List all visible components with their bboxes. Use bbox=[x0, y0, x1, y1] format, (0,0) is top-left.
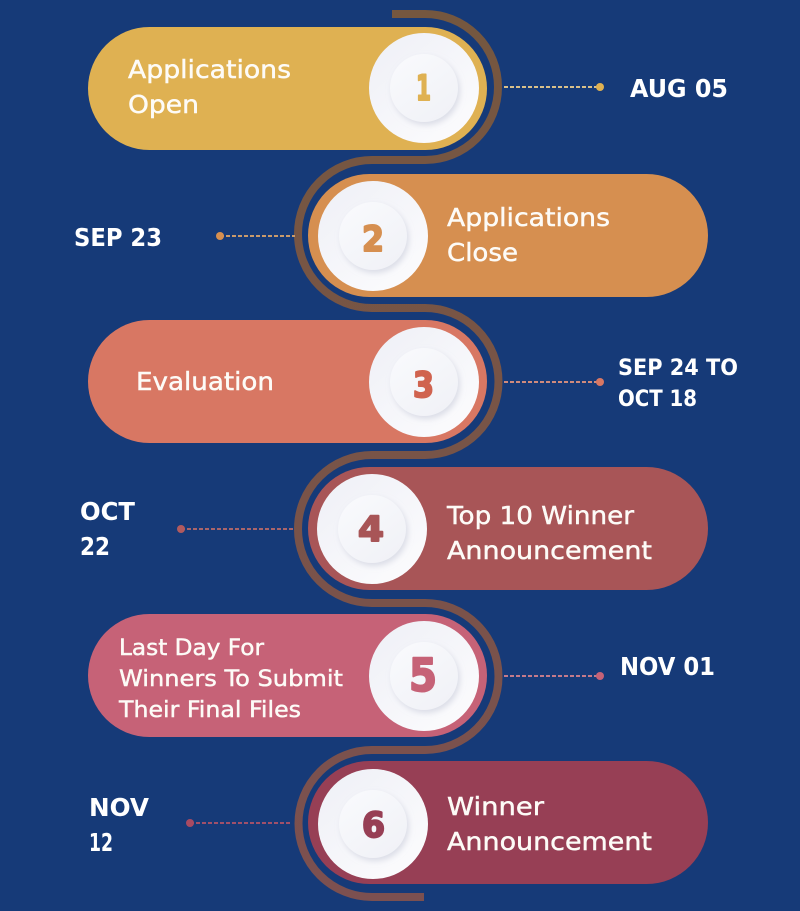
step 2 bbox=[74, 174, 708, 297]
connector to SEP 23 bbox=[216, 232, 295, 240]
date: NOV 12: NOV bbox=[89, 793, 149, 822]
label: Winner Announcement bbox=[447, 792, 652, 856]
label: Top 10 Winner Announcement: Announcement bbox=[447, 536, 652, 565]
connector to SEP 24 TO OCT 18 bbox=[504, 378, 604, 386]
number badge 6 bbox=[318, 769, 428, 879]
date: NOV 01: NOV 01 bbox=[620, 652, 715, 681]
connector to NOV 01 bbox=[504, 672, 604, 680]
step 6 bbox=[89, 761, 708, 884]
number badge 1 bbox=[369, 33, 479, 143]
label: Evaluation: Evaluation bbox=[136, 367, 274, 396]
step 5 bbox=[88, 614, 715, 737]
label: Applications Open bbox=[128, 55, 291, 119]
date: SEP 24 TO OCT 18: OCT 18 bbox=[618, 387, 697, 412]
number badge 5 bbox=[369, 621, 479, 731]
number badge 1: 1 bbox=[416, 69, 431, 109]
pill: Applications Close bbox=[308, 174, 708, 297]
step 3 bbox=[88, 320, 738, 443]
connector to OCT 22 bbox=[177, 525, 295, 533]
label: Top 10 Winner Announcement bbox=[446, 501, 652, 565]
pill: Last Day For Winners To Submit Their Final Files bbox=[88, 614, 487, 737]
number badge 3 bbox=[369, 327, 479, 437]
number badge 4: 4 bbox=[358, 510, 384, 550]
pill: Evaluation bbox=[88, 320, 487, 443]
pill: Winner Announcement bbox=[308, 761, 708, 884]
label: Applications Close bbox=[447, 203, 610, 267]
connector to NOV 12 bbox=[186, 819, 290, 827]
date: OCT 22 bbox=[80, 497, 135, 561]
label: Winner Announcement: Announcement bbox=[447, 827, 652, 856]
date: OCT 22: OCT bbox=[80, 497, 135, 526]
date: OCT 22: 22 bbox=[80, 532, 110, 561]
date: SEP 23: SEP 23 bbox=[74, 223, 162, 252]
pill: Top 10 Winner Announcement bbox=[308, 467, 708, 590]
date: NOV 12 bbox=[89, 793, 149, 857]
label: Last Day For Winners To Submit Their Final Files bbox=[118, 635, 343, 723]
label: Winner Announcement: Winner bbox=[447, 792, 545, 821]
date: NOV 12: 12 bbox=[89, 828, 113, 857]
label: Last Day For Winners To Submit Their Final Files: Winners To Submit bbox=[119, 666, 343, 692]
connector to AUG 05 bbox=[504, 83, 604, 91]
label: Applications Open: Open bbox=[128, 90, 199, 119]
number badge 5: 5 bbox=[409, 649, 437, 702]
number badge 4 bbox=[317, 474, 427, 584]
number badge 6: 6 bbox=[362, 806, 385, 846]
label: Applications Open: Applications bbox=[128, 55, 291, 84]
label: Last Day For Winners To Submit Their Final Files: Last Day For bbox=[119, 635, 265, 661]
date: SEP 24 TO OCT 18: SEP 24 TO bbox=[618, 356, 738, 381]
number badge 2 bbox=[318, 181, 428, 291]
step 4 bbox=[80, 467, 708, 590]
label: Last Day For Winners To Submit Their Final Files: Their Final Files bbox=[118, 697, 301, 723]
label: Top 10 Winner Announcement: Top 10 Winner bbox=[446, 501, 635, 530]
date: SEP 24 TO OCT 18 bbox=[618, 356, 738, 412]
serpentine timeline line bbox=[298, 14, 498, 897]
date: AUG 05: AUG 05 bbox=[630, 74, 728, 103]
label: Applications Close: Close bbox=[447, 238, 518, 267]
pill: Applications Open bbox=[88, 27, 487, 150]
step 1 bbox=[88, 27, 728, 150]
number badge 3: 3 bbox=[413, 366, 434, 406]
label: Applications Close: Applications bbox=[447, 203, 610, 232]
number badge 2: 2 bbox=[362, 220, 384, 260]
